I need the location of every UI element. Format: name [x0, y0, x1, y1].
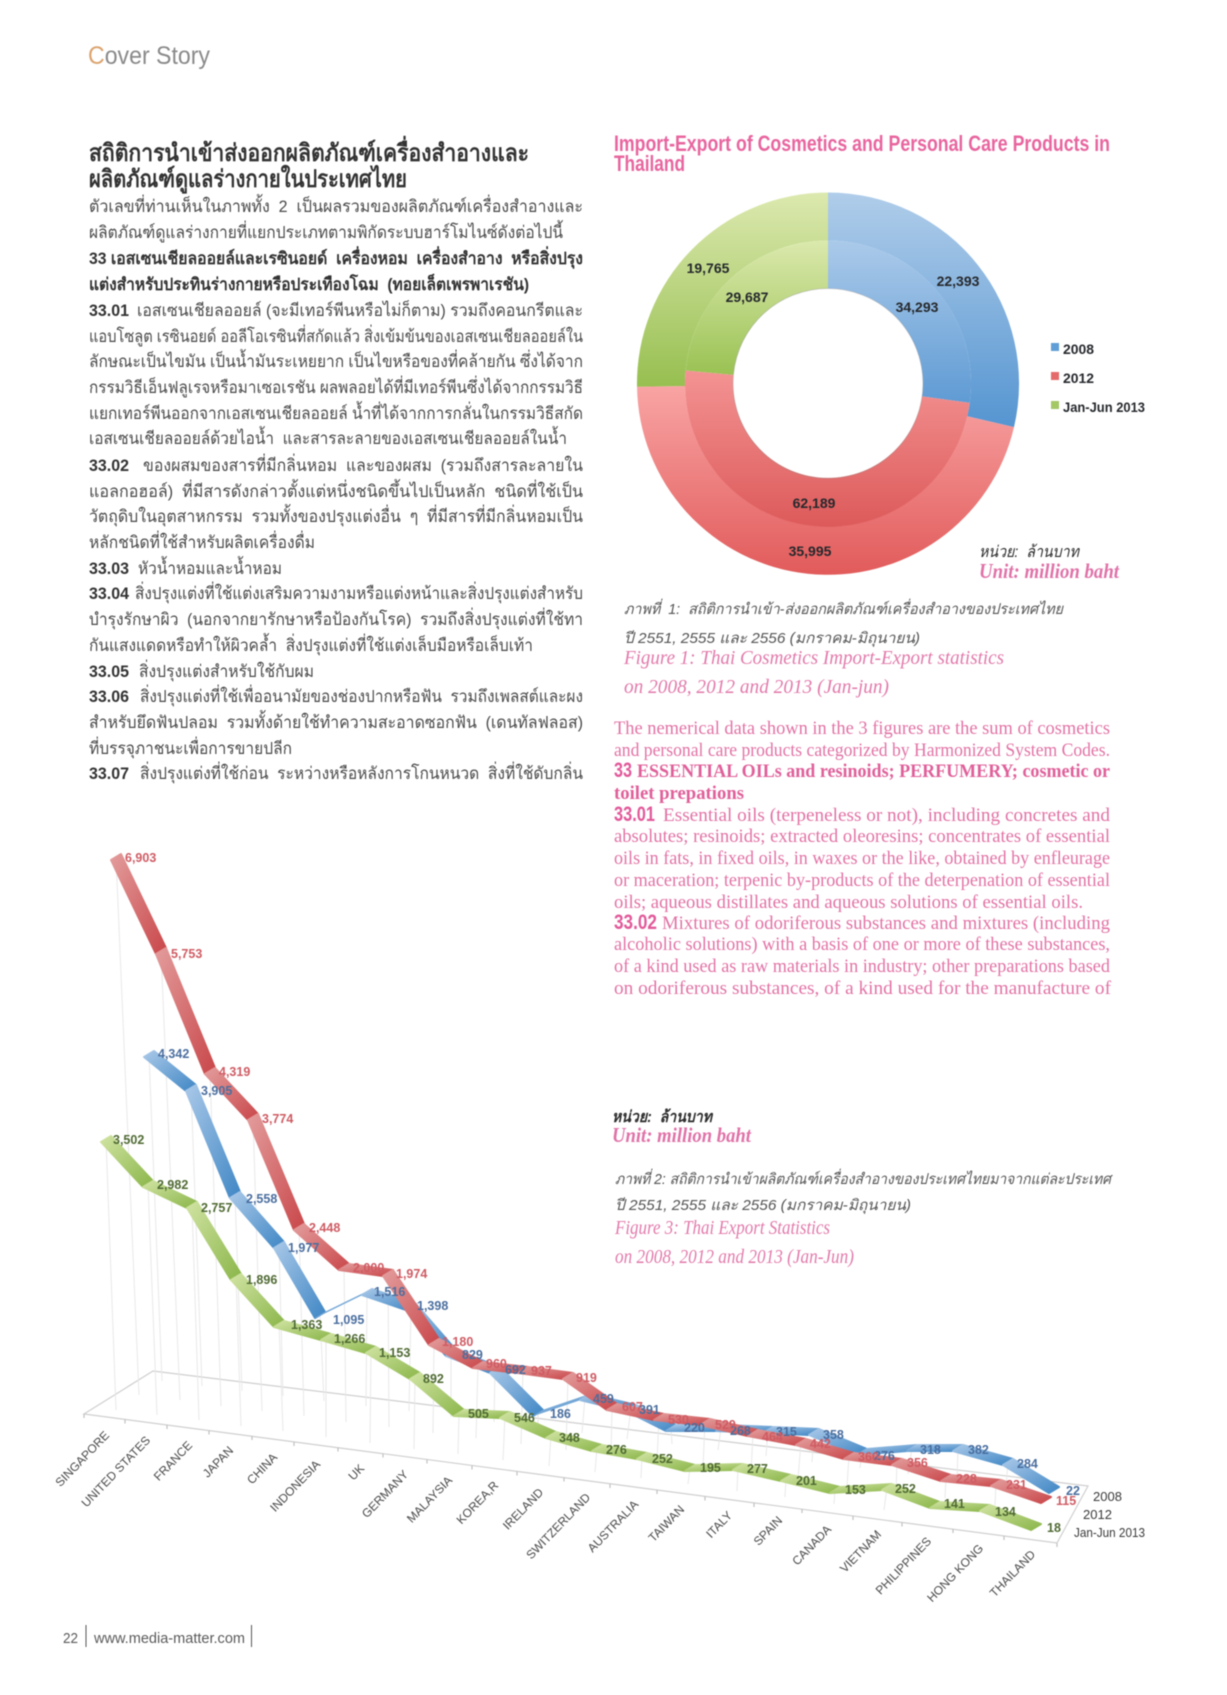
- footer: page number and website: [63, 1625, 252, 1647]
- value labels 2012: 937: [531, 1364, 552, 1378]
- value labels Jan-Jun 2013: 195: [700, 1461, 721, 1475]
- value labels 2008: 1,977: [288, 1241, 319, 1255]
- value labels 2012: 530: [668, 1413, 689, 1427]
- category axis labels: INDONESIA: [267, 1457, 323, 1515]
- footer: page number and website: www.media-matter.com: [93, 1630, 245, 1647]
- value labels 2012: [125, 851, 1076, 1508]
- donut value labels: [687, 260, 980, 559]
- caption: figure 2: on 2008, 2012 and 2013 (Jan-Jun): [615, 1246, 854, 1268]
- category axis labels: FRANCE: [151, 1438, 195, 1484]
- text block: Thai body copy: ที่บรรจุภาชนะเพื่อการขายปลีก: [89, 736, 292, 759]
- caption: figure 2: Figure 3: Thai Export Statistics: [614, 1217, 830, 1239]
- text block: Thai body copy: แอลกอฮอล์) ที่มีสารดังกล่าวตั้งแต่หนึ่งชนิดขึ้นไปเป็นหลัก ชนิดที่ใช้เป็น: [89, 479, 583, 501]
- heading: Thai article title: ผลิตภัณฑ์ดูแลร่างกายในประเทศไทย: [89, 164, 407, 194]
- value labels 2012: 960: [486, 1357, 507, 1371]
- value labels Jan-Jun 2013: 1,153: [379, 1346, 410, 1360]
- value labels 2012: 919: [576, 1371, 597, 1385]
- value labels 2012: 4,319: [219, 1065, 250, 1079]
- value labels 2012: 5,753: [171, 947, 202, 961]
- value labels Jan-Jun 2013: 2,982: [157, 1178, 188, 1192]
- text block: English body copy: alcoholic solutions) with a basis of one or more of these substances,: [614, 934, 1110, 955]
- caption: figure 2: ภาพที่ 2: สถิติการนำเข้าผลิตภัณฑ์เครื่องสำอางของประเทศไทยมาจากแต่ละประเทศ: [615, 1168, 1113, 1188]
- text block: Thai body copy: ลักษณะเป็นไขมัน เป็นน้ำมันระเหยยาก เป็นไขหรือของที่คล้ายกัน ซึ่งได้จาก: [89, 349, 583, 371]
- text block: Thai body copy: เอสเซนเชียลออยล์ (จะมีเทอร์พีนหรือไม่ก็ตาม) รวมถึงคอนกรีตและ: [137, 299, 583, 320]
- legend: donut chart years: Jan-Jun 2013: [1063, 399, 1145, 415]
- unit note: figure 2: หน่วย: ล้านบาท: [612, 1108, 713, 1126]
- text block: Thai body copy: 33.05: [89, 662, 129, 681]
- text block: Thai body copy: หลักชนิดที่ใช้สำหรับผลิตเครื่องดื่ม: [89, 530, 315, 552]
- value labels 2012: 360: [858, 1450, 879, 1464]
- value labels 2008: 318: [920, 1443, 941, 1457]
- value labels Jan-Jun 2013: 3,502: [113, 1133, 144, 1147]
- text block: English body copy: oils in fats, in fixed oils, in waxes or the like, obtained by enfleurage: [614, 848, 1110, 869]
- inner ring: imports: [685, 240, 971, 527]
- heading: Thai article title: สถิติการนำเข้าส่งออกผลิตภัณฑ์เครื่องสำอางและ: [89, 135, 529, 167]
- caption: figure 1: ภาพที่ 1: สถิติการนำเข้า-ส่งออกผลิตภัณฑ์เครื่องสำอางของประเทศไทย: [624, 598, 1064, 618]
- category axis labels: KOREA,R: [454, 1478, 501, 1527]
- value labels 2012: 1,974: [396, 1267, 427, 1281]
- chart floor and axis: [84, 1371, 1088, 1547]
- value labels 2012: 6,903: [125, 851, 156, 865]
- value labels 2012: 356: [907, 1456, 928, 1470]
- text block: Thai body copy: 33.06: [89, 687, 129, 706]
- donut value labels: 62,189: [793, 495, 836, 511]
- text block: Thai body copy: [89, 194, 583, 784]
- donut value labels: 22,393: [937, 273, 980, 289]
- 3D line chart: imports by country: [53, 851, 1145, 1605]
- value labels 2008: 1,398: [417, 1299, 448, 1313]
- text block: Thai body copy: หัวน้ำหอมและน้ำหอม: [138, 556, 282, 578]
- series axis labels: 2008: [1093, 1489, 1122, 1504]
- heading: English chart title: Import-Export of Cosmetics and Personal Care Products in: [614, 131, 1110, 156]
- unit note: figure 2: [612, 1108, 752, 1147]
- text block: Thai body copy: 33.07: [89, 764, 129, 783]
- value labels 2012: 442: [810, 1437, 831, 1451]
- section label: Cover Story: Cover Story: [88, 42, 210, 70]
- text block: Thai body copy: ตัวเลขที่ท่านเห็นในภาพทั้ง 2 เป็นผลรวมของผลิตภัณฑ์เครื่องสำอางและ: [89, 194, 583, 216]
- text block: Thai body copy: ผลิตภัณฑ์ดูแลร่างกายที่แยกประเภทตามพิกัดระบบฮาร์โมไนซ์ดังต่อไปนี้: [89, 220, 563, 243]
- text block: Thai body copy: 33.04: [89, 584, 130, 603]
- value labels Jan-Jun 2013: 153: [845, 1483, 866, 1497]
- text block: Thai body copy: สิ่งปรุงแต่งสำหรับใช้กับผม: [139, 659, 314, 682]
- value labels Jan-Jun 2013: 141: [944, 1497, 965, 1511]
- drop lines: [106, 857, 1008, 1510]
- value labels 2008: 220: [684, 1421, 705, 1435]
- text block: English body copy: [614, 718, 1112, 999]
- value labels 2008: 268: [730, 1424, 751, 1438]
- category axis labels: SWITZERLAND: [523, 1490, 593, 1562]
- text block: Thai body copy: แต่งสำหรับประทินร่างกายหรือประเทืองโฉม (ทอยเล็ตเพรพาเรชัน): [89, 272, 529, 294]
- series 2008 ribbon: [144, 1051, 1059, 1493]
- value labels Jan-Jun 2013: 252: [652, 1452, 673, 1466]
- category axis labels: IRELAND: [500, 1485, 546, 1533]
- value labels Jan-Jun 2013: 1,363: [291, 1318, 322, 1332]
- value labels 2012: 529: [715, 1418, 736, 1432]
- value labels 2012: 228: [956, 1472, 977, 1486]
- value labels 2012: 3,774: [262, 1112, 293, 1126]
- text block: English body copy: ESSENTIAL OILs and resinoids; PERFUMERY; cosmetic or: [637, 761, 1111, 782]
- text block: English body copy: absolutes; resinoids; extracted oleoresins; concentrates of essential: [614, 826, 1110, 847]
- text block: English body copy: toilet prepations: [614, 783, 744, 804]
- series axis labels: Jan-Jun 2013: [1074, 1525, 1145, 1540]
- caption: figure 1: ปี 2551, 2555 และ 2556 (มกราคม-มิถุนายน): [624, 630, 920, 647]
- value labels Jan-Jun 2013: 18: [1047, 1521, 1061, 1535]
- series Jan-Jun 2013 ribbon: [101, 1136, 1041, 1530]
- category axis labels: SINGAPORE: [53, 1428, 112, 1489]
- value labels 2012: 2,448: [309, 1221, 340, 1235]
- value labels 2008: 3,905: [201, 1084, 232, 1098]
- text block: English body copy: or maceration; terpenic by-products of the deterpenation of essential: [614, 870, 1110, 891]
- value labels 2012: 1,180: [442, 1335, 473, 1349]
- value labels 2008: [158, 1047, 1080, 1498]
- value labels Jan-Jun 2013: 348: [559, 1431, 580, 1445]
- text block: Thai body copy: กรรมวิธีเอ็นฟลูเรจหรือมาเซอเรชัน ผลพลอยได้ที่มีเทอร์พีนซึ่งได้จากกรรมวิธี: [89, 375, 583, 398]
- value labels Jan-Jun 2013: 252: [895, 1482, 916, 1496]
- heading: English chart title: [614, 131, 1110, 176]
- text block: English body copy: on odoriferous substances, of a kind used for the manufacture of: [614, 978, 1112, 999]
- value labels Jan-Jun 2013: [113, 1133, 1061, 1535]
- unit note: figure 2: Unit: million baht: [612, 1123, 752, 1147]
- text block: English body copy: and personal care products categorized by Harmonized System Codes.: [614, 740, 1110, 761]
- value labels Jan-Jun 2013: 134: [995, 1505, 1016, 1519]
- value labels Jan-Jun 2013: 1,896: [246, 1273, 277, 1287]
- donut value labels: 29,687: [726, 289, 769, 305]
- value labels 2012: 2,000: [353, 1261, 384, 1275]
- category axis labels: THAILAND: [987, 1547, 1038, 1600]
- value labels 2008: 284: [1017, 1457, 1038, 1471]
- legend: donut chart years: [1051, 341, 1145, 415]
- series 2012 ribbon: [111, 854, 1051, 1503]
- value labels 2008: 1,516: [374, 1285, 405, 1299]
- value labels 2008: 22: [1066, 1484, 1080, 1498]
- text block: Thai body copy: บำรุงรักษาผิว (นอกจากยารักษาหรือป้องกันโรค) รวมถึงสิ่งปรุงแต่งที่ใช้ทา: [89, 607, 583, 630]
- donut chart: import-export totals: [637, 192, 1019, 575]
- text block: Thai body copy: สำหรับยึดฟันปลอม รวมทั้งด้ายใช้ทำความสะอาดซอกฟัน (เดนทัลฟลอส): [89, 710, 583, 732]
- value labels 2008: 276: [874, 1449, 895, 1463]
- category axis labels: CANADA: [789, 1522, 834, 1568]
- category axis labels: GERMANY: [359, 1467, 411, 1521]
- footer: page number and website: 22: [63, 1630, 78, 1647]
- category axis labels: SPAIN: [751, 1513, 785, 1548]
- caption: figure 2: [614, 1168, 1113, 1268]
- category axis labels: AUSTRALIA: [585, 1497, 641, 1555]
- text block: Thai body copy: กันแสงแดดหรือทำให้ผิวคล้ำ สิ่งปรุงแต่งที่ใช้แต่งเล็บมือหรือเล็บเท้า: [89, 633, 533, 656]
- value labels 2008: 2,558: [246, 1192, 277, 1206]
- value labels 2008: 358: [823, 1428, 844, 1442]
- category axis labels: PHILIPPINES: [873, 1534, 934, 1597]
- category axis labels: JAPAN: [200, 1443, 236, 1480]
- category axis labels: UNITED STATES: [79, 1433, 153, 1510]
- value labels 2012: 464: [762, 1430, 783, 1444]
- value labels 2008: 186: [550, 1407, 571, 1421]
- text block: Thai body copy: 33 เอสเซนเชียลออยล์และเรซินอยด์ เครื่องหอม เครื่องสำอาง หรือสิ่งปรุง: [89, 246, 583, 269]
- value labels 2008: 4,342: [158, 1047, 189, 1061]
- category axis labels: ITALY: [703, 1508, 735, 1541]
- value labels 2012: 607: [622, 1400, 643, 1414]
- text block: English body copy: Essential oils (terpeneless or not), including concretes and: [663, 805, 1110, 826]
- value labels 2008: 1,095: [333, 1313, 364, 1327]
- text block: English body copy: 33.02: [614, 911, 657, 934]
- text block: Thai body copy: แยกเทอร์พีนออกจากเอสเซนเชียลออยล์ น้ำที่ได้จากการกลั่นในกรรมวิธีสกัด: [89, 401, 583, 423]
- series axis labels: 2012: [1083, 1507, 1112, 1522]
- value labels 2008: 459: [593, 1392, 614, 1406]
- text block: English body copy: The nemerical data shown in the 3 figures are the sum of cosmetics: [614, 718, 1110, 739]
- category axis labels: CHINA: [244, 1450, 280, 1487]
- category axis labels: UK: [346, 1461, 367, 1483]
- caption: figure 2: ปี 2551, 2555 และ 2556 (มกราคม-มิถุนายน): [615, 1197, 911, 1214]
- heading: English chart title: Thailand: [614, 151, 685, 176]
- text block: English body copy: 33.01: [614, 803, 655, 826]
- text block: Thai body copy: แอบโซลูต เรซินอยด์ ออลีโอเรซินที่สกัดแล้ว สิ่งเข้มข้นของเอสเซนเชียลออยล์ใน: [89, 324, 583, 347]
- value labels Jan-Jun 2013: 1,266: [334, 1332, 365, 1346]
- text block: Thai body copy: วัตถุดิบในอุตสาหกรรม รวมทั้งของปรุงแต่งอื่น ๆ ที่มีสารที่มีกลิ่นหอมเป็น: [89, 504, 583, 527]
- unit note: figure 1: [979, 543, 1120, 583]
- value labels Jan-Jun 2013: 2,757: [201, 1201, 232, 1215]
- text block: Thai body copy: 33.01: [89, 301, 129, 320]
- series axis labels: [1074, 1489, 1145, 1540]
- unit note: figure 1: หน่วย: ล้านบาท: [979, 543, 1080, 561]
- text block: Thai body copy: 33.03: [89, 559, 129, 578]
- value labels 2008: 315: [776, 1425, 797, 1439]
- value labels 2012: 115: [1056, 1494, 1076, 1508]
- category axis labels: HONG KONG: [924, 1541, 986, 1605]
- legend: donut chart years: 2008: [1063, 341, 1094, 357]
- text block: English body copy: Mixtures of odoriferous substances and mixtures (including: [662, 913, 1110, 934]
- text block: Thai body copy: 33.02: [89, 456, 129, 475]
- text block: English body copy: 33: [614, 759, 632, 782]
- value labels 2008: 382: [968, 1443, 989, 1457]
- value labels Jan-Jun 2013: 892: [423, 1372, 444, 1386]
- donut value labels: 34,293: [896, 299, 939, 315]
- value labels Jan-Jun 2013: 276: [606, 1443, 627, 1457]
- value labels 2012: 231: [1006, 1478, 1027, 1492]
- caption: figure 1: [623, 598, 1064, 698]
- text block: Thai body copy: สิ่งปรุงแต่งที่ใช้ก่อน ระหว่างหรือหลังการโกนหนวด สิ่งที่ใช้ดับกลิ่น: [140, 761, 583, 784]
- text block: English body copy: of a kind used as raw materials in industry; other preparations based: [614, 956, 1110, 977]
- category axis labels: VIETNAM: [837, 1527, 884, 1575]
- donut value labels: 35,995: [789, 543, 832, 559]
- caption: figure 1: Figure 1: Thai Cosmetics Import-Export statistics: [623, 647, 1004, 669]
- value labels 2008: 829: [462, 1348, 483, 1362]
- value labels Jan-Jun 2013: 505: [468, 1407, 489, 1421]
- outer ring: exports: [637, 192, 1019, 575]
- value labels Jan-Jun 2013: 201: [796, 1474, 817, 1488]
- value labels 2008: 692: [505, 1363, 526, 1377]
- unit note: figure 1: Unit: million baht: [979, 559, 1120, 583]
- donut value labels: 19,765: [687, 260, 730, 276]
- value labels Jan-Jun 2013: 546: [514, 1411, 535, 1425]
- value labels 2008: 391: [639, 1403, 660, 1417]
- text block: Thai body copy: เอสเซนเชียลออยล์ด้วยไอน้ำ และสารละลายของเอสเซนเชียลออยล์ในน้ำ: [89, 426, 567, 448]
- category axis labels: MALAYSIA: [404, 1473, 455, 1526]
- text block: Thai body copy: สิ่งปรุงแต่งที่ใช้แต่งเสริมความงามหรือแต่งหน้าและสิ่งปรุงแต่งสำหรับ: [135, 581, 583, 604]
- category axis labels: TAIWAN: [646, 1502, 687, 1545]
- category axis labels: [53, 1428, 1038, 1605]
- text block: Thai body copy: สิ่งปรุงแต่งที่ใช้เพื่ออนามัยของช่องปากหรือฟัน รวมถึงเพลสต์และผง: [140, 684, 583, 707]
- legend: donut chart years: 2012: [1063, 370, 1094, 386]
- caption: figure 1: on 2008, 2012 and 2013 (Jan-jun): [624, 676, 889, 698]
- value labels Jan-Jun 2013: 277: [747, 1462, 768, 1476]
- text block: English body copy: oils; aqueous distillates and aqueous solutions of essential oils.: [614, 892, 1083, 913]
- text block: Thai body copy: ของผสมของสารที่มีกลิ่นหอม และของผสม (รวมถึงสารละลายใน: [143, 453, 583, 475]
- heading: Thai article title: [89, 135, 529, 194]
